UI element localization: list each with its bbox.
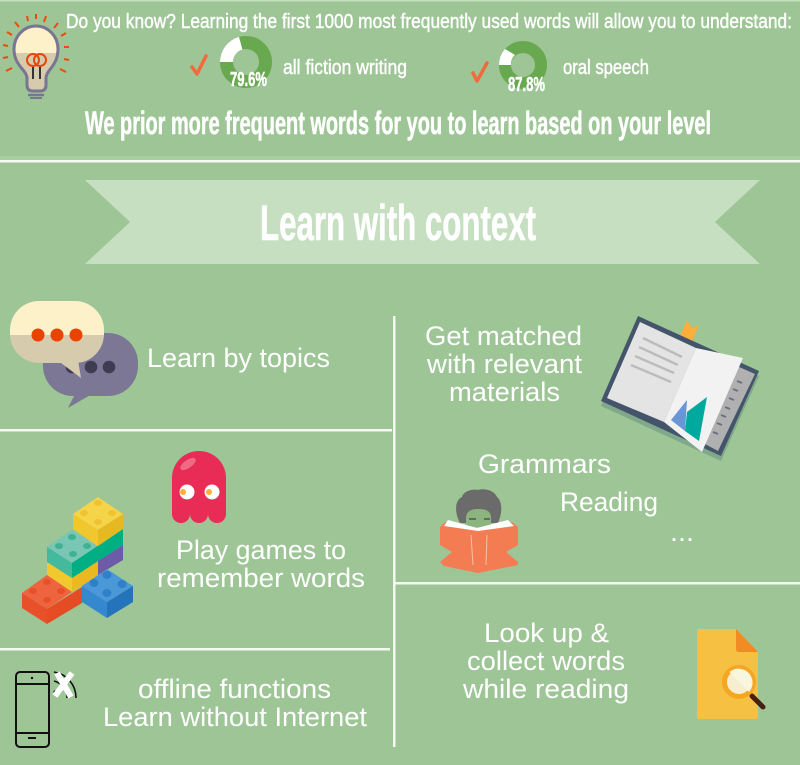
- panel: look up words: [462, 618, 763, 719]
- label: all fiction writing: all fiction writing: [283, 57, 407, 79]
- text: play games: Play games to: [176, 535, 346, 565]
- icon: toy bricks: [22, 497, 133, 624]
- panel: matched materials: [425, 316, 759, 461]
- panel: learn by topics: [10, 300, 330, 408]
- chart: speech donut: [499, 47, 545, 96]
- text: play games: [157, 535, 365, 593]
- text: offline functions: [103, 674, 367, 732]
- icon: ghost: [172, 451, 226, 523]
- text: get matched: [425, 321, 583, 407]
- text: offline functions: offline functions: [138, 674, 331, 704]
- label: oral speech: oral speech: [563, 57, 649, 79]
- text: offline functions: Learn without Internet: [103, 702, 367, 732]
- chart: speech donut: 87.8%: [508, 74, 545, 96]
- icon: chat bubbles: [10, 300, 138, 408]
- icon: open book: [601, 316, 759, 461]
- text: get matched: with relevant: [426, 349, 583, 379]
- text: learn by topics: Learn by topics: [147, 343, 330, 373]
- banner: learn with context: [85, 180, 760, 264]
- text: get matched: materials: [449, 377, 560, 407]
- text: get matched: Get matched: [425, 321, 582, 351]
- chart: fiction donut: 79.6%: [230, 69, 267, 91]
- icon: document with magnifier: [697, 629, 763, 719]
- banner: learn with context: Learn with context: [260, 195, 536, 251]
- icon: check mark one: [192, 56, 206, 74]
- panel: offline functions: [16, 672, 367, 747]
- text: ellipsis: ...: [670, 517, 694, 547]
- text: look up: Look up &: [484, 618, 609, 648]
- text: play games: remember words: [157, 563, 365, 593]
- text: grammars: Grammars: [478, 449, 611, 479]
- text: look up: [462, 618, 629, 704]
- text: look up: while reading: [462, 674, 629, 704]
- icon: light bulb: [3, 14, 69, 98]
- icon: phone without wifi: [16, 672, 76, 747]
- text: look up: collect words: [467, 646, 625, 676]
- icon: check mark two: [473, 63, 487, 81]
- panel: grammars and reading: [440, 449, 694, 573]
- chart: fiction donut: [220, 37, 267, 91]
- icon: person reading: [440, 489, 518, 573]
- text: reading: Reading: [560, 487, 658, 517]
- panel: play games: [22, 451, 365, 624]
